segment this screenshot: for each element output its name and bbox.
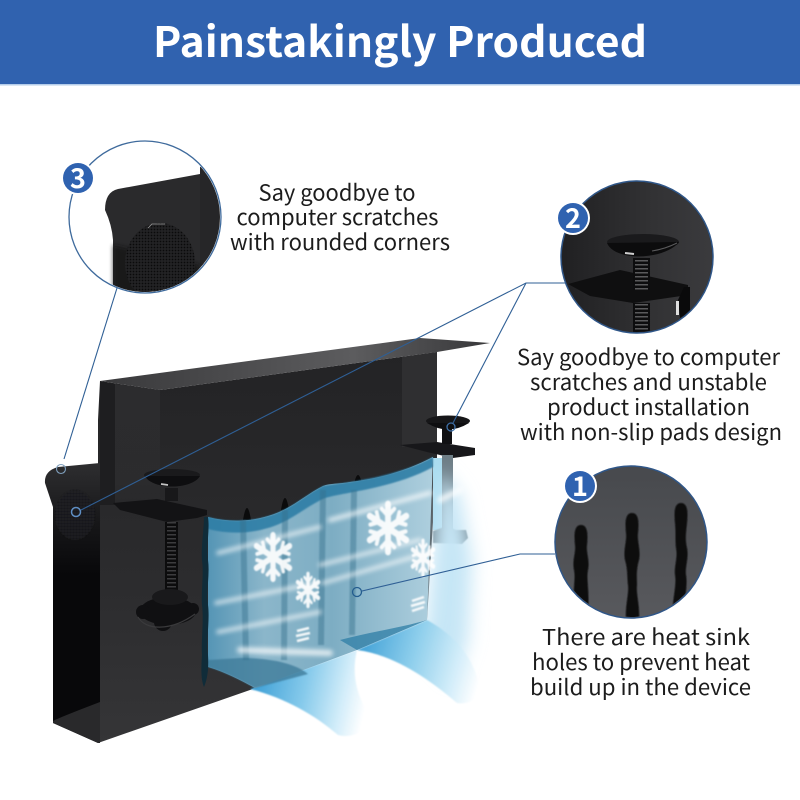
main back panel <box>98 352 437 743</box>
badge 3: 3 <box>70 157 86 196</box>
caption 1: There are heat sink <box>542 620 750 652</box>
vertical slot ghosts <box>243 490 354 660</box>
airflow bottom strip <box>208 658 308 688</box>
airflow lower band 2 <box>357 620 480 703</box>
caption 3 <box>230 176 450 257</box>
caption 1: holes to prevent heat <box>532 645 750 677</box>
right fold <box>402 352 437 447</box>
callout 3: rounded corner detail <box>63 140 222 294</box>
caption 2: with non-slip pads design <box>520 415 782 447</box>
top shelf <box>100 338 490 390</box>
snowflakes <box>256 504 433 641</box>
caption 2: scratches and unstable <box>530 365 767 397</box>
caption 3: computer scratches <box>236 200 438 232</box>
title: Painstakingly Produced <box>153 9 647 70</box>
badge 2 <box>556 197 590 236</box>
caption 1 <box>530 620 751 702</box>
anchor ring: flap <box>56 464 66 474</box>
badge 3 <box>61 157 95 196</box>
caption 3: Say goodbye to <box>258 176 416 208</box>
cooling airflow <box>208 457 480 736</box>
callout leader lines <box>56 283 565 596</box>
flap lower return <box>53 702 100 743</box>
caption 3: with rounded corners <box>230 225 450 257</box>
left clamp <box>113 469 209 687</box>
knob <box>136 589 199 631</box>
clamp plate <box>113 499 207 522</box>
airflow top dark strip <box>208 457 433 533</box>
stem <box>633 258 650 276</box>
badge 1 <box>563 465 597 504</box>
left fold <box>115 384 160 505</box>
airflow lower band 1 <box>250 650 372 736</box>
left flap <box>45 463 100 743</box>
grip pad <box>55 490 95 540</box>
inset image <box>573 503 688 620</box>
airflow main sheet over panel <box>208 457 433 688</box>
caption 2 <box>517 340 782 447</box>
caption 2: product installation <box>547 390 750 422</box>
velcro pad <box>125 223 194 292</box>
anchor ring: slot <box>352 588 362 596</box>
light haze outside panel <box>420 470 472 680</box>
anchor ring: screw <box>447 423 455 431</box>
caption 1: build up in the device <box>530 670 751 702</box>
wavy slot with highlights <box>201 517 209 687</box>
anchor ring: pad <box>72 508 80 516</box>
product: laptop holder bracket <box>45 338 490 743</box>
suction disc <box>607 234 679 256</box>
badge 2: 2 <box>565 197 581 236</box>
heat sink slots <box>243 475 362 520</box>
badge 1: 1 <box>572 465 588 504</box>
callout 2: screw pad detail <box>556 180 716 335</box>
header banner <box>0 0 800 86</box>
right clamp <box>400 416 475 544</box>
callout 1: heat sink holes detail <box>555 465 707 620</box>
bracket <box>568 270 688 303</box>
inset image <box>562 195 712 332</box>
white streaks <box>216 490 460 653</box>
screw stem <box>165 522 178 593</box>
inset image <box>105 166 220 292</box>
caption 2: Say goodbye to computer <box>517 340 780 372</box>
suction pad <box>144 469 200 486</box>
